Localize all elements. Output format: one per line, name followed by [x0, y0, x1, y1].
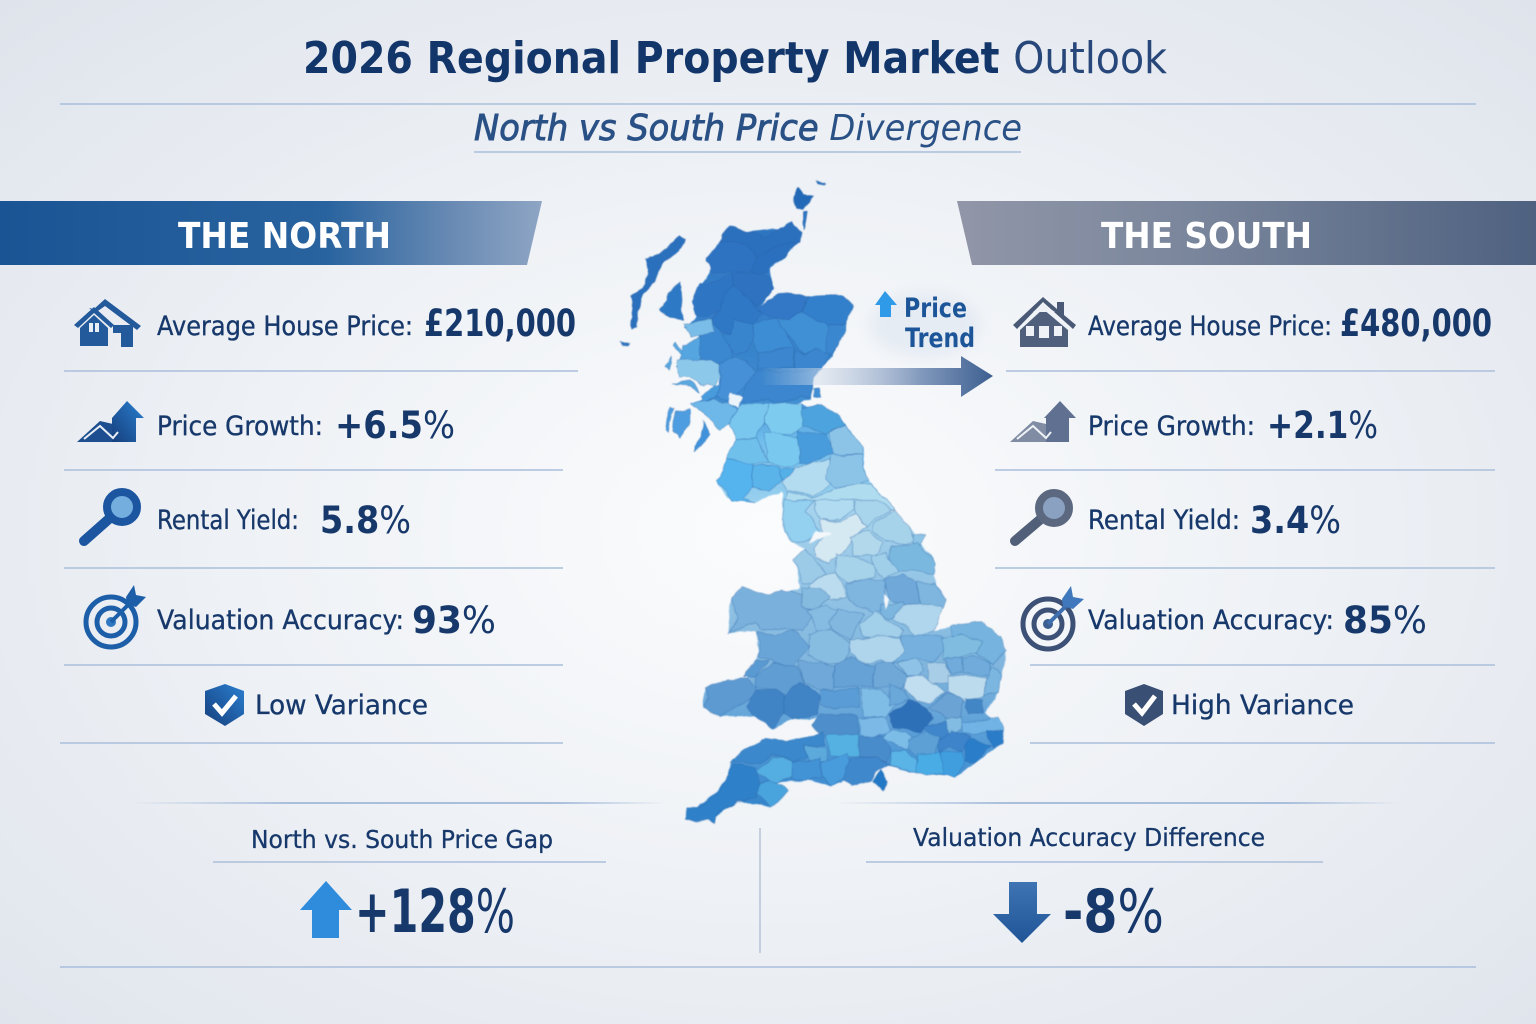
panel: the south banner: THE SOUTH — [1101, 216, 1312, 257]
map: England and Wales — [687, 500, 1007, 823]
stat: rental yield south: Rental Yield: — [1088, 505, 1240, 536]
stat: average house price north: £210,000 — [424, 302, 576, 345]
panel: the north banner: THE NORTH — [178, 216, 391, 257]
stat: price growth south: Price Growth: — [1088, 411, 1255, 442]
stat: low variance: Low Variance — [255, 690, 428, 721]
stat: valuation accuracy north: 93% — [412, 599, 496, 642]
title: 2026 Regional Property Market Outlook — [303, 33, 1167, 84]
stat: high variance — [1125, 684, 1354, 726]
stat: average house price north: Average House Price: — [157, 311, 413, 342]
arrow: price trend up — [875, 291, 897, 317]
stat: rental yield south — [1015, 493, 1341, 542]
stat: valuation accuracy south — [1023, 586, 1427, 649]
stat: rental yield north — [84, 492, 411, 542]
stat: price growth south — [1010, 401, 1378, 447]
panel: valuation accuracy difference: -8% — [1063, 877, 1164, 947]
icon: rising arrow — [77, 401, 144, 442]
icon: down arrow — [993, 882, 1051, 943]
stat: average house price south: £480,000 — [1340, 302, 1492, 345]
stat: price growth south: +2.1% — [1267, 404, 1378, 447]
subtitle: North vs South Price Divergence — [474, 108, 1022, 149]
label: price trend — [904, 293, 975, 354]
stat: average house price south: Average House Price: — [1088, 311, 1332, 342]
panel: valuation accuracy difference — [866, 823, 1323, 947]
stat: valuation accuracy north — [86, 585, 496, 647]
icon: key — [84, 492, 137, 541]
panel: north vs south price gap — [213, 825, 606, 947]
icon: up arrow — [300, 881, 352, 938]
stat: valuation accuracy north: Valuation Accuracy: — [157, 605, 404, 636]
stat: price growth north: Price Growth: — [157, 411, 323, 442]
stat: rental yield south: 3.4% — [1250, 499, 1341, 542]
panel: north vs south price gap: +128% — [355, 877, 515, 947]
stat: high variance: High Variance — [1171, 690, 1354, 721]
panel: north statistics — [60, 299, 578, 743]
price trend callout with arrow — [760, 291, 993, 397]
stat: rental yield north: 5.8% — [320, 499, 411, 542]
map of Great Britain — [620, 181, 1007, 823]
icon: rising arrow — [1010, 401, 1076, 442]
icon: shield check — [1125, 684, 1163, 726]
panel: valuation accuracy difference: Valuation Accuracy Difference — [913, 823, 1265, 852]
stat: rental yield north: Rental Yield: — [157, 505, 299, 536]
label: price trend: Trend — [905, 323, 975, 354]
map: Scotland and far north — [620, 181, 893, 510]
stat: average house price north — [74, 299, 576, 347]
stat: valuation accuracy south: 85% — [1343, 599, 1427, 642]
panel: north vs south price gap: North vs. South Price Gap — [251, 825, 553, 854]
panel: south statistics — [995, 297, 1495, 743]
arrow: north to south — [760, 356, 993, 397]
stat: price growth north: +6.5% — [335, 404, 455, 447]
label: price trend: Price — [904, 293, 967, 324]
icon: houses — [74, 299, 141, 347]
icon: target — [86, 585, 146, 647]
icon: key — [1015, 493, 1069, 541]
icon: shield check — [205, 684, 244, 726]
stat: average house price south — [1013, 297, 1492, 347]
stat: valuation accuracy south: Valuation Accuracy: — [1088, 605, 1334, 636]
stat: price growth north — [77, 401, 455, 447]
icon: house — [1013, 297, 1076, 347]
icon: target — [1023, 586, 1084, 649]
panel: the south banner — [957, 201, 1536, 265]
stat: low variance — [205, 684, 428, 726]
panel: the north banner — [0, 201, 542, 265]
